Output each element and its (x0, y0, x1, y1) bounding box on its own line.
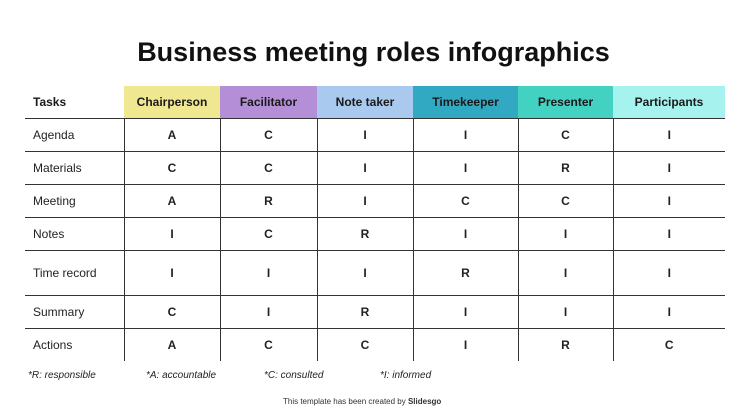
table: RACI matrix: C (264, 128, 273, 142)
table: RACI matrix: A (168, 128, 176, 142)
table: RACI matrix: R (361, 305, 369, 319)
table: RACI matrix: R (264, 194, 273, 208)
table: RACI matrix: Note taker (336, 95, 394, 109)
table: RACI matrix: Agenda (33, 128, 74, 142)
table: RACI matrix: I (464, 305, 467, 319)
table: RACI matrix: I (564, 266, 567, 280)
table: RACI matrix: C (264, 161, 273, 175)
table: RACI matrix: I (363, 266, 367, 280)
table: RACI matrix: C (168, 305, 176, 319)
table: RACI matrix: R (461, 266, 470, 280)
table: RACI matrix: Materials (33, 161, 82, 175)
table: RACI matrix: I (668, 305, 671, 319)
table: RACI matrix (25, 86, 725, 361)
table: RACI matrix: I (464, 338, 467, 352)
table: RACI matrix: C (665, 338, 674, 352)
table: RACI matrix: I (668, 161, 671, 175)
table: RACI matrix: I (363, 161, 367, 175)
table: RACI matrix: C (561, 194, 570, 208)
table: RACI matrix: C (264, 227, 273, 241)
table: RACI matrix: I (668, 227, 671, 241)
table: RACI matrix: I (267, 305, 270, 319)
table: RACI matrix: Summary (33, 305, 84, 319)
table: RACI matrix: C (461, 194, 470, 208)
table: RACI matrix: Presenter (538, 95, 593, 109)
table: RACI matrix: I (170, 227, 174, 241)
table: RACI matrix: Time record (33, 266, 97, 280)
table: RACI matrix: Facilitator (240, 95, 297, 109)
table: RACI matrix: R (561, 161, 570, 175)
legend (28, 370, 432, 381)
table: RACI matrix: R (361, 227, 369, 241)
table: RACI matrix: I (363, 194, 367, 208)
table: RACI matrix: Participants (635, 95, 703, 109)
table: RACI matrix: Meeting (33, 194, 76, 208)
table: RACI matrix: I (668, 266, 671, 280)
table: RACI matrix: Timekeeper (432, 95, 499, 109)
title: Business meeting roles infographics (137, 37, 610, 67)
table: RACI matrix: A (168, 338, 176, 352)
legend: *C: consulted (264, 370, 323, 381)
table: RACI matrix: C (361, 338, 369, 352)
table: RACI matrix: I (668, 194, 671, 208)
table: RACI matrix: C (561, 128, 570, 142)
table: RACI matrix: I (564, 227, 567, 241)
table: RACI matrix: I (564, 305, 567, 319)
legend: *I: informed (380, 370, 431, 381)
table: RACI matrix: A (168, 194, 176, 208)
table: RACI matrix: I (464, 227, 467, 241)
legend: *R: responsible (28, 370, 96, 381)
table: RACI matrix: I (464, 128, 467, 142)
table: RACI matrix: Chairperson (137, 95, 207, 109)
table: RACI matrix: Tasks (33, 95, 66, 109)
table: RACI matrix: C (264, 338, 273, 352)
table: RACI matrix: C (168, 161, 176, 175)
table: RACI matrix: I (363, 128, 367, 142)
footer credit: This template has been created by Slidesgo (283, 397, 441, 406)
table: RACI matrix: I (267, 266, 270, 280)
legend: *A: accountable (146, 370, 216, 381)
table: RACI matrix: I (668, 128, 671, 142)
table: RACI matrix: Actions (33, 338, 72, 352)
table: RACI matrix: R (561, 338, 570, 352)
table: RACI matrix: Notes (33, 227, 64, 241)
table: RACI matrix: I (170, 266, 174, 280)
table: RACI matrix: I (464, 161, 467, 175)
